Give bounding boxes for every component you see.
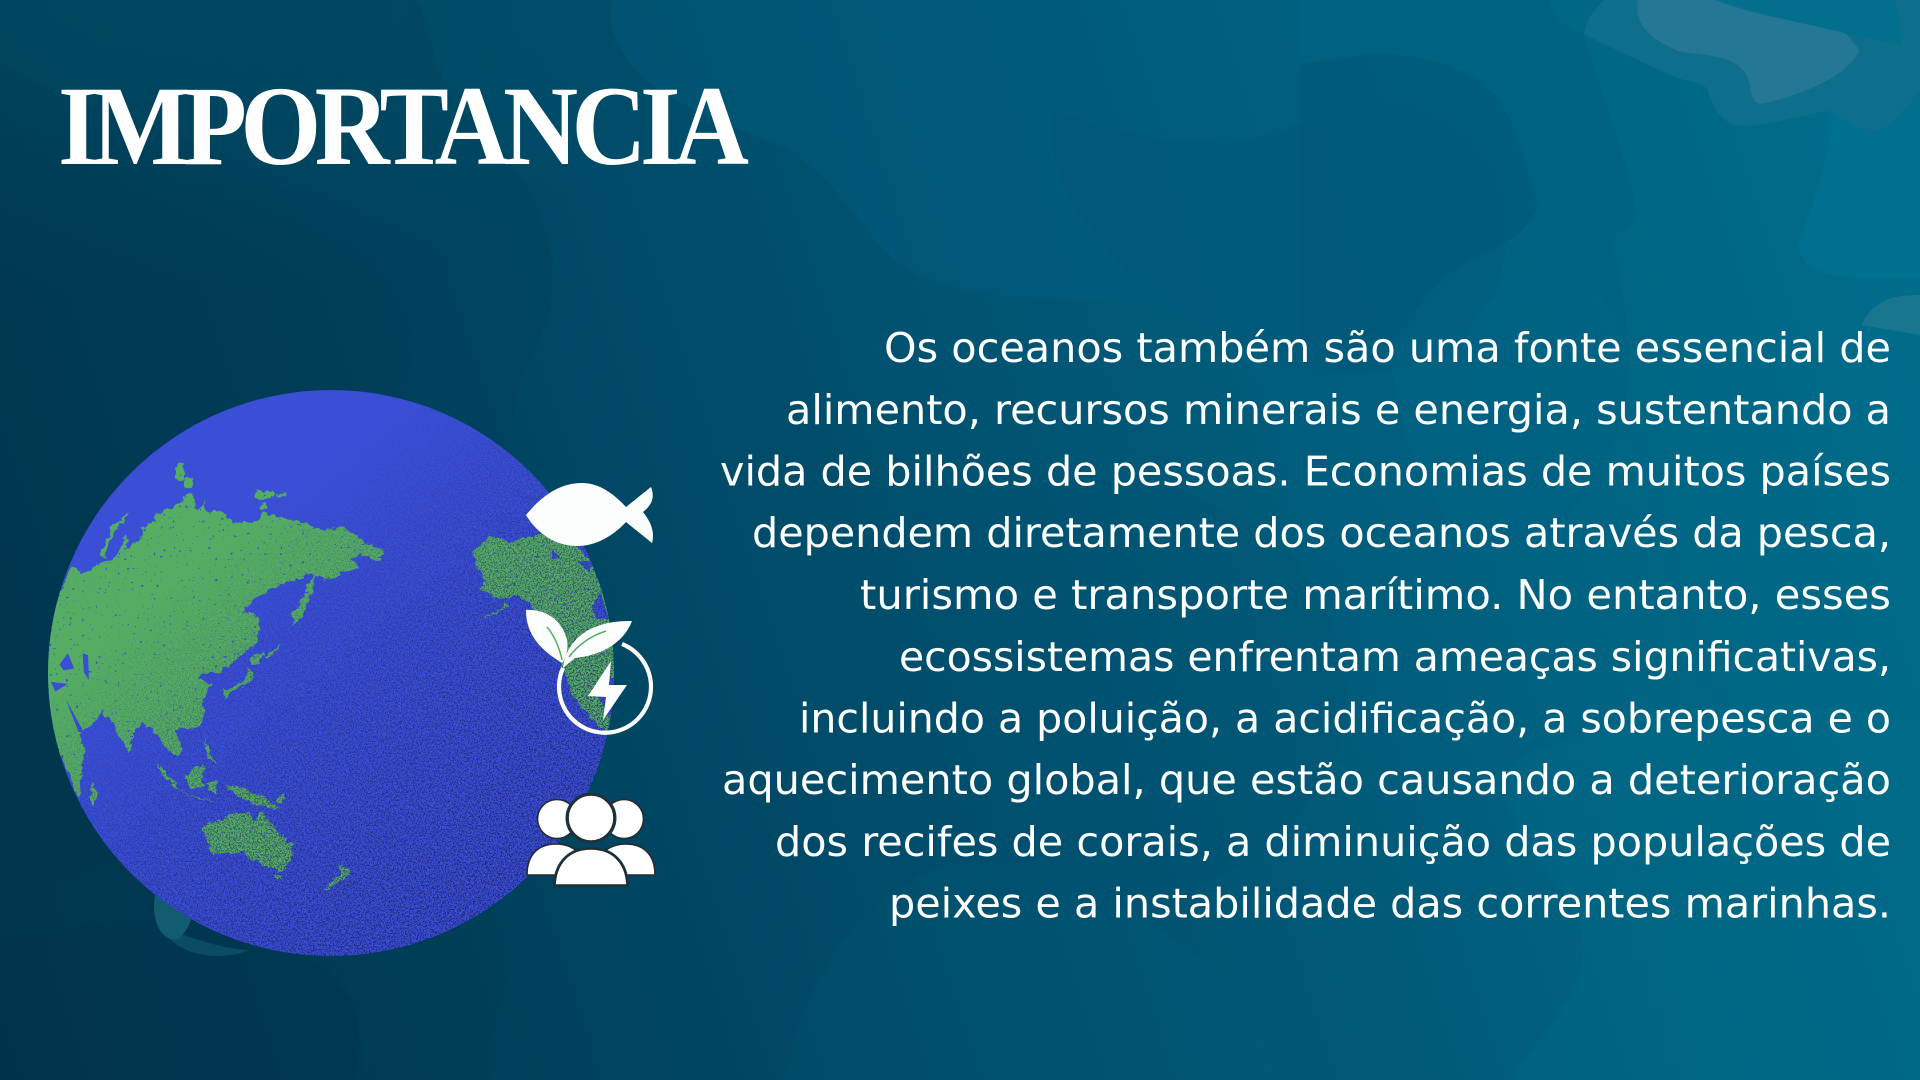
body text: vida de bilhões de pessoas. Economias de muitos países <box>720 448 1891 496</box>
body text: turismo e transporte marítimo. No entanto, esses <box>860 571 1891 619</box>
body text: dependem diretamente dos oceanos através da pesca, <box>752 509 1891 557</box>
icon: people <box>527 794 655 885</box>
globe grain <box>40 380 620 970</box>
body text: aquecimento global, que estão causando a deterioração <box>722 756 1891 804</box>
icon: plant and energy <box>526 610 651 733</box>
body text: dos recifes de corais, a diminuição das populações de <box>775 818 1891 866</box>
icon: fish <box>526 483 653 546</box>
body text: incluindo a poluição, a acidificação, a sobrepesca e o <box>799 694 1891 742</box>
globe <box>38 380 620 970</box>
continents <box>38 464 617 889</box>
body text: alimento, recursos minerais e energia, sustentando a <box>786 386 1891 434</box>
title: IMPORTANCIA <box>58 64 749 189</box>
body text: ecossistemas enfrentam ameaças significativas, <box>899 633 1891 681</box>
body text <box>720 324 1891 928</box>
body text: peixes e a instabilidade das correntes marinhas. <box>889 880 1891 928</box>
inland seas <box>51 550 617 734</box>
body text: Os oceanos também são uma fonte essencial de <box>884 324 1891 372</box>
